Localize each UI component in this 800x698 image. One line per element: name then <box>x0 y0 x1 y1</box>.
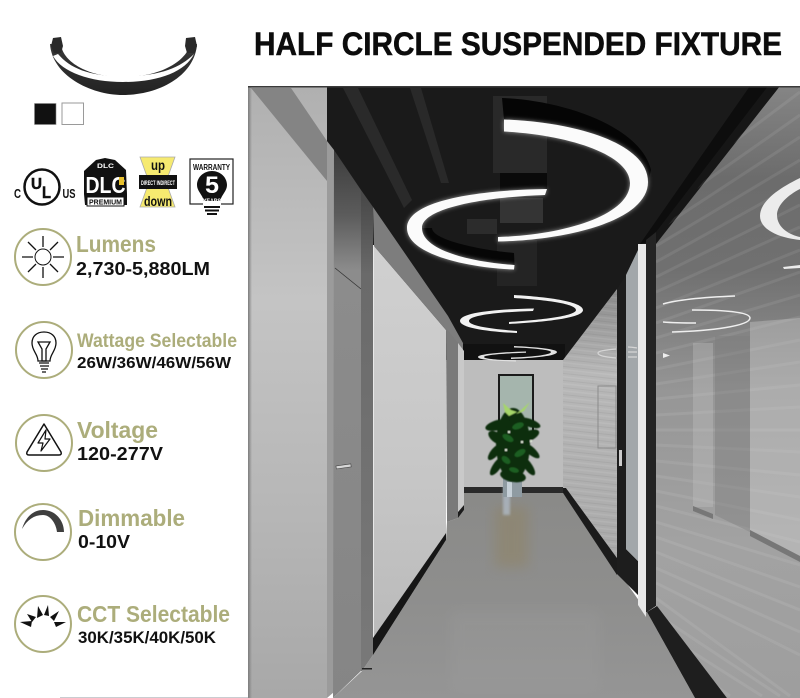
small ring lights <box>478 346 557 362</box>
product image: half circle fixture <box>50 37 197 95</box>
colour swatch: white <box>62 103 84 124</box>
back picture <box>498 374 534 434</box>
certification: 5 year warranty: 5 <box>205 172 219 199</box>
certification: up / down direct indirect: down <box>144 193 172 209</box>
certification: 5 year warranty: WARRANTY <box>193 163 231 172</box>
spec: wattage <box>16 322 237 378</box>
spec: lumens <box>15 229 210 285</box>
far door section <box>446 328 464 522</box>
left baseboard <box>373 533 446 655</box>
certification: 5 year warranty: YEARS <box>203 199 221 205</box>
blinds texture <box>656 88 800 562</box>
icon: light bulb <box>16 322 72 378</box>
heading: voltage: Voltage <box>77 417 158 443</box>
heading: dimmable: Dimmable <box>78 505 185 531</box>
heading: cct: CCT Selectable <box>77 601 230 627</box>
reflection: small ring on glass <box>598 347 670 358</box>
soffit band left <box>251 88 327 181</box>
value: lumens: 2,730-5,880LM <box>76 259 210 279</box>
colour swatch: black <box>34 104 56 124</box>
photo top edge <box>248 86 800 88</box>
floor <box>333 493 695 698</box>
value: dimmable: 0-10V <box>78 532 130 552</box>
certification: DLC premium <box>84 158 127 206</box>
bottom grey rule <box>60 697 248 698</box>
plant <box>484 402 542 497</box>
back baseboard <box>463 487 563 493</box>
certification: DLC premium: DLC <box>97 164 115 170</box>
right baseboard <box>647 606 727 698</box>
certification: cULus: C <box>14 186 21 201</box>
large upper ring light <box>498 120 648 242</box>
certification: cULus: L <box>42 183 51 202</box>
certification: DLC premium: PREMIUM <box>89 198 122 206</box>
back wall <box>463 360 563 488</box>
centre glass wall <box>563 289 617 575</box>
heading: lumens: Lumens <box>76 231 156 257</box>
spec: voltage <box>16 415 163 471</box>
icon: dimmer arc <box>15 504 71 560</box>
fixture bodies and glow <box>407 98 651 270</box>
photo: corridor with suspended fixtures <box>248 86 800 698</box>
large lower ring light <box>407 189 547 270</box>
value: cct: 30K/35K/40K/50K <box>78 629 216 647</box>
left door frame and door <box>327 141 374 698</box>
floor reflection <box>494 487 530 569</box>
icon: sun <box>15 229 71 285</box>
value: wattage: 26W/36W/46W/56W <box>77 355 232 372</box>
right glass wall <box>656 86 800 698</box>
spec: cct <box>15 596 230 652</box>
ceiling <box>327 88 779 360</box>
heading: wattage: Wattage Selectable <box>77 331 237 352</box>
reflection: medium ring on glass <box>663 296 750 332</box>
spec: dimmable <box>15 504 185 560</box>
reflection: large ring on glass <box>760 178 800 269</box>
certification: DLC premium: DLC <box>86 172 126 198</box>
certification: cULus: US <box>62 186 76 201</box>
dark glass header <box>656 86 780 244</box>
certification: cULus: U <box>31 176 42 193</box>
certification: up / down direct indirect: up <box>151 157 165 173</box>
black door frame and glass door <box>617 250 638 595</box>
right side wall <box>374 246 446 638</box>
icon: voltage triangle <box>16 415 72 471</box>
soffit band right <box>373 207 463 352</box>
icon: colour temperature rays <box>15 596 71 652</box>
certification: up / down direct indirect: DIRECT INDIRECT <box>141 181 175 187</box>
certification: up / down direct indirect <box>139 157 177 209</box>
white post <box>638 244 646 617</box>
left wall <box>248 87 327 698</box>
black post <box>646 232 656 612</box>
certification: cULus <box>14 170 76 204</box>
value: voltage: 120-277V <box>77 444 163 464</box>
medium ring lights <box>460 295 583 333</box>
certification: 5 year warranty <box>190 159 233 215</box>
